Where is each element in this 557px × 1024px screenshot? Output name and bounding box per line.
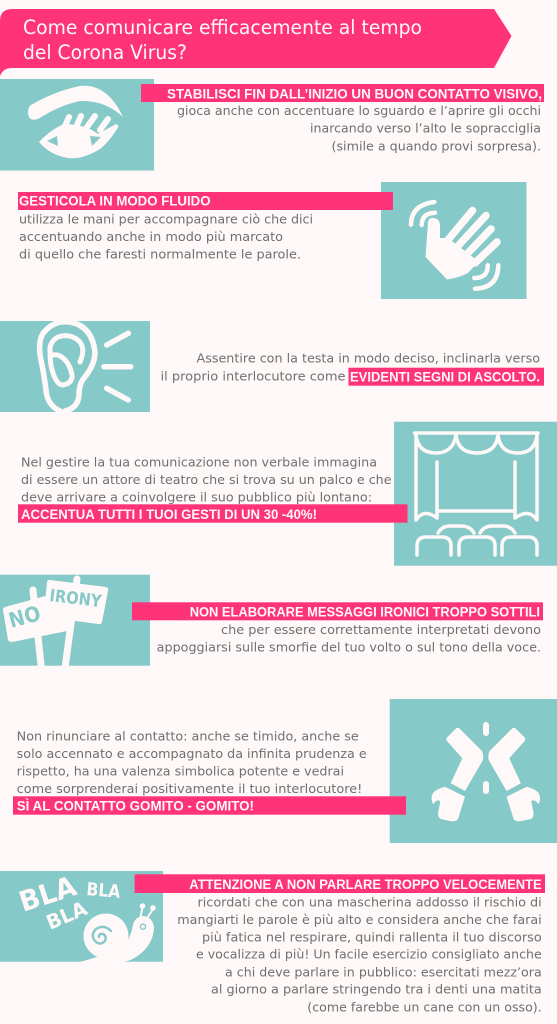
icon: no irony signs: NO bbox=[6, 601, 43, 633]
heading bar bbox=[13, 796, 406, 815]
body text: (simile a quando provi sorpresa). bbox=[332, 139, 541, 154]
icon: theatre stage bbox=[414, 433, 538, 555]
icon: no irony signs bbox=[3, 579, 108, 686]
heading bar: GESTICOLA IN MODO FLUIDO bbox=[19, 194, 210, 209]
panel: no irony bbox=[0, 575, 543, 686]
panel: fluid gestures bbox=[18, 182, 526, 299]
icon: bla bla snail: BLA bbox=[43, 896, 91, 935]
body text: come sorprenderai positivamente il tuo interlocutore! bbox=[17, 781, 362, 796]
body text: accentuando anche in modo più marcato bbox=[19, 229, 283, 244]
body text: gioca anche con accentuare lo sguardo e l’aprire gli occhi bbox=[177, 103, 541, 118]
panel: eye contact bbox=[0, 79, 544, 170]
body text: inarcando verso l’alto le sopracciglia bbox=[310, 121, 541, 136]
panel: speak slowly bbox=[0, 869, 545, 1014]
body text: solo accennato e accompagnato da infinita prudenza e bbox=[17, 746, 367, 761]
heading bar bbox=[135, 874, 545, 893]
body text: utilizza le mani per accompagnare ciò che dici bbox=[19, 211, 313, 226]
icon: bla bla snail: BLA bbox=[15, 869, 81, 919]
body text: di essere un attore di teatro che si trova su un palco e che bbox=[21, 472, 392, 487]
body text bbox=[19, 211, 313, 262]
heading bar: ACCENTUA TUTTI I TUOI GESTI DI UN 30 -40%! bbox=[21, 507, 317, 522]
title banner: del Corona Virus? bbox=[23, 41, 187, 64]
body text: a chi deve parlare in pubblico: esercitati mezz’ora bbox=[225, 964, 542, 979]
heading bar bbox=[18, 192, 393, 210]
body text: più fatica nel respirare, quindi rallenta il tuo discorso bbox=[202, 929, 542, 944]
body text: di quello che faresti normalmente le parole. bbox=[19, 246, 301, 262]
heading bar: STABILISCI FIN DALL’INIZIO UN BUON CONTATTO VISIVO, bbox=[167, 86, 542, 101]
title banner: Come comunicare efficacemente al tempo bbox=[23, 16, 422, 39]
body text bbox=[17, 729, 367, 796]
body text bbox=[177, 894, 542, 1014]
body text: ricordati che con una mascherina addosso il rischio di bbox=[198, 894, 542, 909]
body text: deve arrivare a coinvolgere il suo pubblico più lontano: bbox=[21, 490, 372, 505]
heading bar bbox=[18, 504, 408, 523]
icon: ear bbox=[40, 322, 95, 411]
body text: che per essere correttamente interpretati devono bbox=[221, 622, 541, 637]
body text: Assentire con la testa in modo deciso, inclinarla verso bbox=[196, 351, 540, 366]
icon: eye bbox=[28, 86, 123, 158]
icon: sound lines bbox=[104, 333, 131, 400]
heading bar: NON ELABORARE MESSAGGI IRONICI TROPPO SOTTILI bbox=[190, 605, 540, 620]
body text bbox=[177, 103, 541, 154]
heading bar: SÌ AL CONTATTO GOMITO - GOMITO! bbox=[17, 799, 254, 814]
icon: bla bla snail: BLA bbox=[86, 879, 121, 903]
icon: no irony signs: IRONY bbox=[48, 586, 103, 612]
icon: elbow bump bbox=[432, 722, 540, 821]
highlighted text: EVIDENTI SEGNI DI ASCOLTO. bbox=[350, 369, 540, 384]
title banner bbox=[0, 9, 512, 76]
body text: mangiarti le parole è più alto e considera anche che farai bbox=[177, 912, 542, 927]
body text: Non rinunciare al contatto: anche se timido, anche se bbox=[17, 729, 359, 744]
body text bbox=[157, 622, 541, 655]
body text: e vocalizza di più! Un facile esercizio consigliato anche bbox=[196, 947, 542, 962]
body text bbox=[160, 351, 540, 383]
icon: waving hand bbox=[411, 202, 498, 289]
panel: theatre bbox=[18, 422, 557, 566]
body text bbox=[21, 455, 392, 505]
panel: elbow contact bbox=[13, 699, 557, 843]
body text: (come farebbe un cane con un osso). bbox=[307, 999, 542, 1014]
body text: il proprio interlocutore come bbox=[160, 368, 346, 383]
heading bar: ATTENZIONE A NON PARLARE TROPPO VELOCEMENTE bbox=[189, 877, 542, 892]
body text: rispetto, ha una valenza simbolica potente e vedrai bbox=[17, 764, 344, 779]
icon: bla bla snail bbox=[15, 869, 156, 962]
body text: Nel gestire la tua comunicazione non verbale immagina bbox=[21, 455, 377, 470]
body text: appoggiarsi sulle smorfie del tuo volto o sul tono della voce. bbox=[157, 640, 541, 655]
panel: listening signs bbox=[0, 321, 544, 412]
body text: al giorno a parlare stringendo tra i denti una matita bbox=[211, 982, 542, 997]
